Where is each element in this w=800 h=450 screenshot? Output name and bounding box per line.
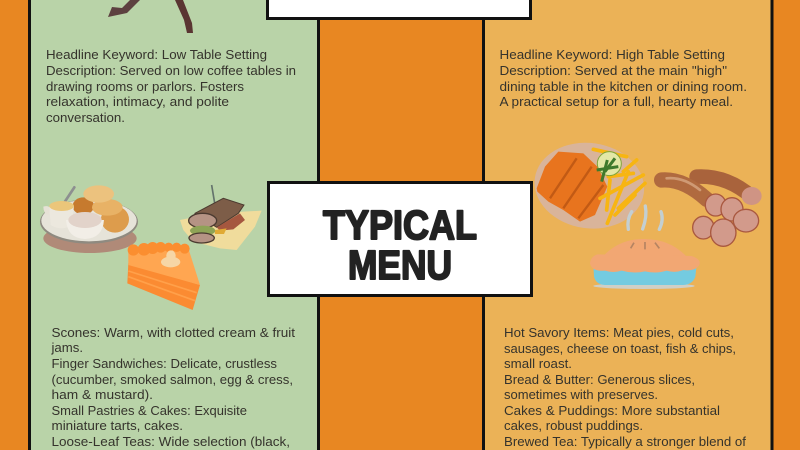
panel: low tea (left column) — [30, 0, 318, 450]
heading text: TYPICAL — [323, 202, 477, 248]
text block: low tea menu: Finger Sandwiches: Delicate, crustless — [52, 356, 277, 371]
icon: sausages — [662, 177, 762, 246]
heading box: top (cropped) — [268, 0, 530, 18]
text block: low table setting — [46, 47, 296, 125]
icon: scones plate — [40, 185, 138, 253]
icon: steaming pie — [590, 206, 700, 289]
text block: high tea menu: Hot Savory Items: Meat pies, cold cuts, — [504, 325, 734, 340]
text block: high tea menu: Brewed Tea: Typically a stronger blend of — [504, 434, 746, 449]
text block: high tea menu: sometimes with preserves. — [504, 387, 658, 402]
text block: low tea menu: jams. — [50, 340, 83, 355]
text block: high table setting: Headline Keyword: High Table Setting — [500, 47, 725, 62]
icon: schnitzel and chips plate — [529, 136, 650, 236]
text block: low table setting: conversation. — [46, 110, 125, 125]
text block: low tea menu: ham & mustard). — [52, 387, 153, 402]
text block: high tea menu: Bread & Butter: Generous slices, — [504, 372, 695, 387]
text block: low tea menu: Loose-Leaf Teas: Wide selection (black, — [52, 434, 290, 449]
panel: high tea (right column) — [484, 0, 772, 450]
text block: high table setting: Description: Served at the main "high" — [500, 63, 727, 78]
heading text — [323, 202, 477, 288]
text block: low tea menu: Small Pastries & Cakes: Exquisite — [52, 403, 247, 418]
text block: high tea menu: sausages, cheese on toast, fish & chips, — [504, 341, 736, 356]
text block: low table setting: relaxation, intimacy, and polite — [46, 94, 229, 109]
text block: high table setting — [500, 47, 747, 109]
icon: low table legs — [108, 0, 193, 33]
text block: high tea menu: small roast. — [504, 356, 572, 371]
text block: high tea menu: cakes, robust puddings. — [504, 418, 643, 433]
text block: low table setting: drawing rooms or parlors. Fosters — [46, 79, 245, 94]
icon: wrapped sandwich — [180, 185, 262, 250]
heading box: typical menu — [268, 182, 532, 296]
text block: low table setting: Headline Keyword: Low Table Setting — [46, 47, 267, 62]
text block: high table setting: dining table in the kitchen or dining room. — [500, 79, 747, 94]
text block: high tea menu — [504, 325, 746, 449]
text block: low tea menu — [50, 325, 295, 449]
text block: low tea menu: miniature tarts, cakes. — [52, 418, 183, 433]
text block: low table setting: Description: Served on low coffee tables in — [46, 63, 296, 78]
text block: low tea menu: Scones: Warm, with clotted cream & fruit — [52, 325, 295, 340]
heading text: MENU — [348, 242, 452, 288]
text block: low tea menu: (cucumber, smoked salmon, egg & cress, — [52, 372, 293, 387]
text block: high tea menu: Cakes & Puddings: More substantial — [504, 403, 720, 418]
icon: pumpkin pie slice — [127, 242, 200, 310]
text block: high table setting: A practical setup for a full, hearty meal. — [500, 94, 733, 109]
